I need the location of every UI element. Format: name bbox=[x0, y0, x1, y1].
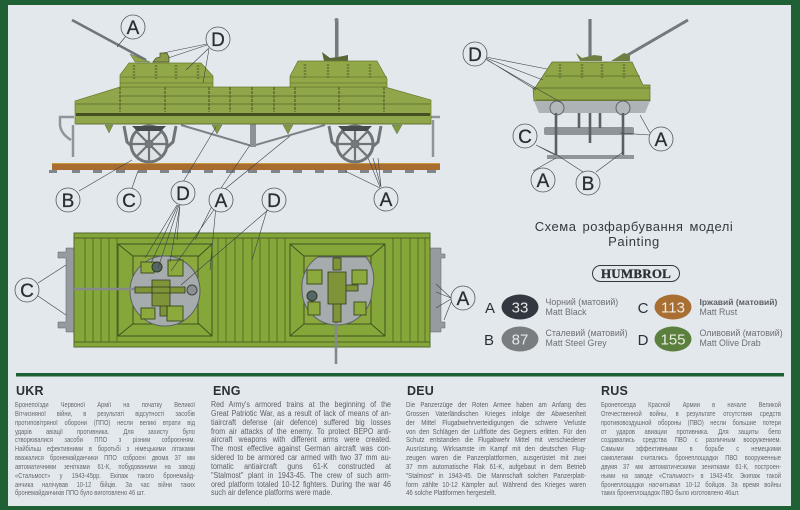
text block: ENG bbox=[211, 401, 391, 497]
heading: RUS: RUS bbox=[601, 384, 628, 398]
callout letters: A bbox=[215, 191, 228, 212]
right turret with gun bbox=[290, 18, 387, 87]
top view of the wagon bbox=[58, 233, 445, 364]
end view undercarriage bbox=[534, 101, 650, 159]
paint B: 87 bbox=[512, 332, 528, 348]
callout letters: A bbox=[380, 190, 393, 211]
paint A: 33 bbox=[512, 300, 528, 316]
callout letters: D bbox=[267, 191, 281, 212]
callout letters bbox=[15, 15, 673, 310]
left turret with gun bbox=[72, 20, 213, 87]
paint C: 113 bbox=[661, 300, 685, 316]
paint C: Іржавий (матовий) bbox=[700, 297, 777, 307]
paint A: A bbox=[485, 300, 495, 317]
callout letters: D bbox=[176, 184, 190, 205]
callout letters: B bbox=[582, 174, 594, 195]
paint B bbox=[484, 326, 628, 352]
paint B: B bbox=[484, 332, 494, 349]
heading: UKR: UKR bbox=[16, 384, 44, 398]
paint A bbox=[485, 294, 618, 320]
callout letters: A bbox=[537, 171, 550, 192]
text block: DEU bbox=[406, 401, 586, 497]
painting title: Painting bbox=[608, 234, 660, 249]
end view guns bbox=[588, 19, 592, 61]
text block: RUS bbox=[601, 401, 781, 497]
callout letters: A bbox=[457, 289, 470, 310]
paint B: Matt Steel Grey bbox=[546, 338, 607, 348]
paint D: 155 bbox=[660, 332, 686, 348]
paint D: Оливовий (матовий) bbox=[700, 328, 783, 338]
leader lines bbox=[38, 36, 650, 320]
divider bbox=[16, 373, 784, 376]
painting title: Схема розфарбування моделі bbox=[535, 219, 733, 234]
right buffers bbox=[430, 248, 445, 332]
paint A: Matt Black bbox=[546, 307, 587, 317]
end view of the wagon bbox=[533, 19, 688, 159]
deck planks bbox=[85, 238, 425, 342]
callout letters: A bbox=[127, 18, 140, 39]
paint D: D bbox=[638, 332, 649, 349]
humbrol logo: HUMBROL bbox=[601, 266, 671, 281]
paint C: Matt Rust bbox=[700, 307, 738, 317]
wagon hull bbox=[75, 87, 431, 134]
left platform bbox=[74, 244, 212, 336]
side view of the wagon bbox=[49, 18, 440, 173]
couplers bbox=[60, 117, 440, 157]
paint D: Matt Olive Drab bbox=[700, 338, 761, 348]
rail and sleepers bbox=[49, 163, 440, 173]
callout letters: B bbox=[62, 191, 74, 212]
paint D bbox=[638, 326, 783, 352]
truss rods bbox=[181, 125, 325, 146]
end view armoured body bbox=[533, 62, 650, 101]
text block: UKR bbox=[15, 401, 195, 497]
callout letters: D bbox=[468, 45, 482, 66]
deck bbox=[74, 233, 430, 347]
callout letters: C bbox=[518, 127, 532, 148]
left buffers bbox=[58, 248, 75, 332]
callout letters: D bbox=[211, 30, 225, 51]
painting title bbox=[535, 219, 733, 249]
heading: ENG: ENG bbox=[213, 384, 241, 398]
paint A: Чорний (матовий) bbox=[546, 297, 618, 307]
wheel: left bbox=[124, 126, 176, 162]
paint C bbox=[638, 294, 777, 320]
paint B: Сталевий (матовий) bbox=[546, 328, 628, 338]
paint C: C bbox=[638, 300, 649, 317]
callout letters: C bbox=[122, 191, 136, 212]
callout letters: C bbox=[20, 281, 34, 302]
callout letters: A bbox=[655, 130, 668, 151]
wheel: right bbox=[329, 126, 381, 162]
heading: DEU: DEU bbox=[407, 384, 434, 398]
right platform bbox=[290, 244, 385, 364]
